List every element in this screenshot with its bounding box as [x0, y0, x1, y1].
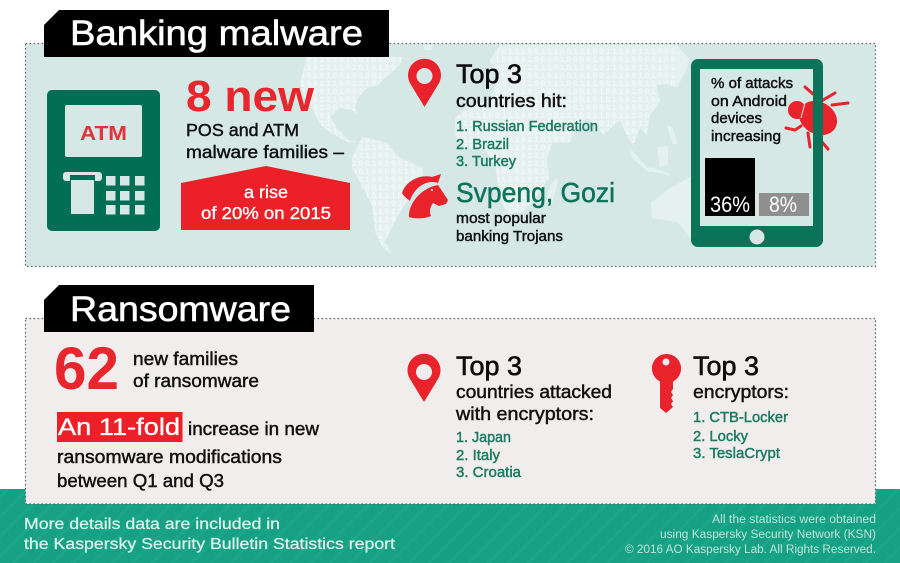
text: increase in new ransomware modifications: ransomware modifications [57, 447, 282, 467]
text: top 3 encryptors: 1. CTB-Locker [693, 409, 788, 426]
text: top 3 countries hit [456, 59, 598, 170]
world map: 0101001010000100001000010000100001000010000100001000010000 [300, 104, 677, 113]
bar chart: 8% [769, 192, 797, 217]
text: top 3 countries hit: countries hit: [456, 90, 567, 111]
heading: Banking malware [44, 10, 389, 57]
text: top 3 countries hit: 2. Brazil [456, 136, 509, 153]
icon: Trojan horse [402, 174, 448, 218]
world map: 0111001110011100111001110011100111001110011100111001110011 [300, 232, 677, 241]
world map: 0101000101000101000101000101000101000101000101000101000101 [300, 200, 677, 209]
stat: 8 new: 8 new [186, 72, 315, 121]
panel background [26, 318, 876, 504]
text: Svpeng, Gozi banking Trojans: banking Trojans [456, 228, 563, 245]
footer: more details [24, 516, 396, 553]
text: Svpeng, Gozi banking Trojans: Svpeng, Gozi [456, 177, 615, 208]
text: top 3 encryptors: Top 3 [693, 351, 759, 381]
text: percent of attacks: devices [711, 111, 762, 127]
world map: 1010010100101001010010100101001010010100101001010010100101 [300, 128, 677, 137]
panel: ransomware [26, 318, 876, 504]
text: percent of attacks: increasing [711, 129, 781, 145]
footer: statistics source and copyright: © 2016 AO Kaspersky Lab. All Rights Reserved. [625, 544, 876, 556]
text: increase in new ransomware modifications: between Q1 and Q3 [57, 471, 224, 491]
world map: 1001010010100101001010010100101001010010100101001010010100 [300, 240, 677, 249]
world map: 0010100101001010010100101001010010100101001010010100101001 [300, 72, 677, 81]
tablet screen [700, 69, 813, 226]
world map: 1011011101101110110111011011101101110110111011011101101110 [300, 192, 677, 201]
panel: banking malware [26, 44, 876, 266]
world map [300, 45, 692, 257]
icon: ATM [47, 90, 160, 231]
highlight: An 11-fold: An 11-fold [58, 414, 180, 441]
text: increase in new ransomware modifications: increase in new [188, 419, 320, 439]
text: top 3 encryptors [693, 351, 789, 462]
footer: more details: More details data are included in [24, 516, 280, 533]
heading: Ransomware: Ransomware [70, 290, 291, 329]
callout: rise of 20%: a rise [244, 182, 288, 202]
text: new families of ransomware [133, 349, 259, 391]
world map: 1110110111011011101101110110111011011101101110110111011011 [300, 208, 677, 217]
callout: rise of 20% [181, 166, 350, 230]
world map: 0011100111001110011100111001110011100111001110011100111001 [300, 48, 677, 57]
world map: 1010101011010101011010101011010101011010101011010101011010 [300, 144, 677, 153]
text: top 3 encryptors: encryptors: [693, 381, 789, 402]
panel background [26, 44, 876, 266]
world map: 0001100110001100110001100110001100110001100110001100110001 [300, 184, 677, 193]
world map: 1100111001100111001100111001100111001100111001100111001100 [300, 112, 677, 121]
world map: 0100101001010010100101001010010100101001010010100101001010 [300, 88, 677, 97]
world map: 1101011010101101011010110101101011010110101101011010110101 [300, 64, 677, 73]
text: top 3 countries hit: 1. Russian Federation [456, 118, 598, 135]
world map: 0100000100100000100100000100100000100100000100100000100100 [300, 168, 677, 177]
tablet frame [691, 59, 823, 247]
text: increase in new ransomware modifications [57, 419, 320, 491]
footer: statistics source and copyright: using Kaspersky Security Network (KSN) [660, 529, 876, 541]
text: top 3 countries hit: Top 3 [456, 59, 522, 89]
text: percent of attacks: on Android [711, 94, 787, 110]
text: top 3 countries attacked: countries attacked [456, 381, 612, 402]
text: new families of ransomware: new families [133, 349, 238, 369]
footer: statistics source and copyright [625, 514, 876, 556]
world map: 1100100101100100101100100101100100101100100101100100101100 [300, 176, 677, 185]
world map: 0101101001011010010110100101101001011010010110100101101001 [300, 136, 677, 145]
text: top 3 encryptors: 2. Locky [693, 428, 748, 445]
world map: 0010011001001100100110010011001001100100110010011001001100 [300, 216, 677, 225]
callout: rise of 20%: of 20% on 2015 [201, 203, 331, 223]
world map: 0011100101110010111001011100101110010111001011100101110010 [300, 152, 677, 161]
text: top 3 countries attacked: with encryptors: [455, 403, 594, 424]
bar chart: 36% [710, 192, 750, 217]
text: POS and ATM malware families [186, 120, 344, 162]
text: top 3 encryptors: 3. TeslaCrypt [693, 445, 781, 462]
footer band [0, 489, 900, 563]
text: Svpeng, Gozi banking Trojans [456, 177, 615, 245]
text: top 3 countries attacked: 2. Italy [456, 447, 500, 464]
icon: map pin [408, 59, 441, 107]
text: top 3 countries hit: 3. Turkey [456, 153, 516, 170]
world map: 0101010101010101010101010101010101010101010101010101010101 [300, 248, 677, 257]
text: Svpeng, Gozi banking Trojans: most popular [456, 210, 546, 227]
text: new families of ransomware: of ransomware [133, 371, 259, 391]
world map: 0011100110011100110011100110011100110011100110011100110011 [300, 120, 677, 129]
bar chart [705, 158, 809, 217]
heading: Ransomware [44, 285, 314, 332]
world map: 1001010010101001010010101001010010101001010010101001010010 [300, 96, 677, 105]
icon: bug [786, 87, 848, 149]
world map: 1011010110100001000010000100001000010000100001000010000100 [300, 56, 677, 65]
text: POS and ATM malware families: malware families – [186, 142, 344, 162]
text: top 3 countries attacked: 1. Japan [456, 429, 511, 446]
text: top 3 countries attacked: Top 3 [456, 351, 522, 381]
stat: 62: 62 [54, 335, 119, 402]
footer: more details: the Kaspersky Security Bulletin Statistics report [24, 536, 396, 553]
footer: statistics source and copyright: All the statistics were obtained [712, 514, 876, 526]
world map: 1010010100101001010010100101001010010100101001010010100101 [300, 224, 677, 233]
icon: key [652, 354, 681, 413]
text: percent of attacks [711, 76, 793, 145]
tablet with Android attacks chart [691, 59, 848, 247]
text: top 3 countries attacked [455, 351, 612, 481]
world map: 1001110011100111001110011100111001110011100111001110011100 [300, 80, 677, 89]
world map: 1001010010010100100101001001010010010100100101001001010010 [300, 160, 677, 169]
text: top 3 countries attacked: 3. Croatia [456, 464, 522, 481]
heading: Banking malware: Banking malware [70, 14, 363, 53]
text: POS and ATM malware families: POS and ATM [186, 120, 299, 140]
icon: ATM: ATM [80, 123, 127, 145]
text: percent of attacks: % of attacks [711, 76, 793, 92]
icon: map pin [408, 354, 441, 402]
